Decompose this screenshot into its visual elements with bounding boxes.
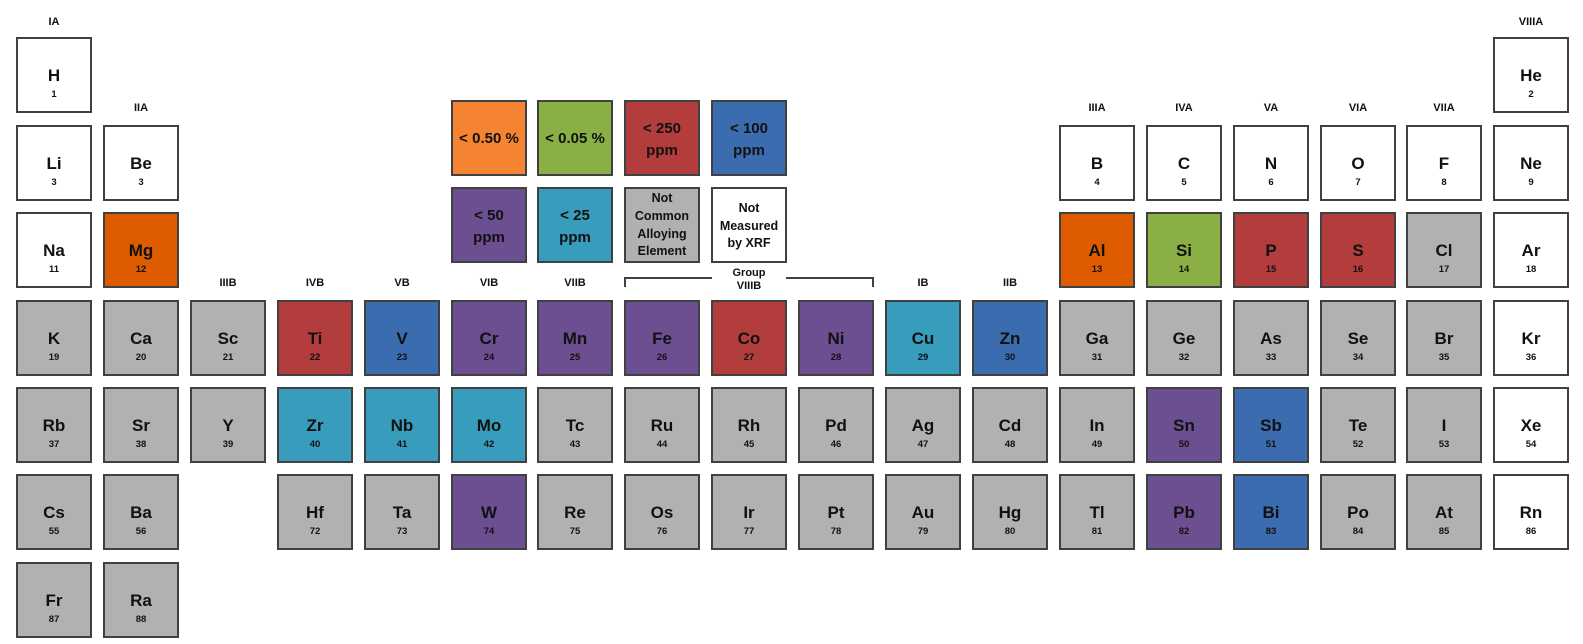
- element: Ag: Ag: [912, 416, 934, 435]
- element: V: 23: [397, 352, 407, 363]
- element: Pt: 78: [831, 526, 841, 537]
- element: Co: 27: [744, 352, 754, 363]
- element: Na: 11: [49, 264, 59, 275]
- element: Cs: Cs: [43, 503, 65, 522]
- element: P: [1233, 212, 1309, 288]
- element: Re: [537, 474, 613, 550]
- element: Sr: [103, 387, 179, 463]
- element: Sc: Sc: [218, 329, 238, 348]
- element: Bi: 83: [1266, 526, 1276, 537]
- element: P: P: [1265, 241, 1277, 260]
- element: Cs: 55: [49, 526, 59, 537]
- element: O: O: [1351, 154, 1365, 173]
- legend item: under 50 ppm: < 50: [474, 206, 504, 224]
- group label: VB: VB: [394, 277, 410, 289]
- legend item: not common alloying element: Not: [652, 191, 672, 205]
- element: Ne: [1493, 125, 1569, 201]
- element: Cl: 17: [1439, 264, 1449, 275]
- group label: VIB: VIB: [480, 277, 498, 289]
- element: Ga: 31: [1092, 352, 1102, 363]
- element: Rh: Rh: [738, 416, 760, 435]
- element: Ge: 32: [1179, 352, 1189, 363]
- element: Te: [1320, 387, 1396, 463]
- element: B: B: [1091, 154, 1103, 173]
- element: Ca: [103, 300, 179, 376]
- element: Pd: Pd: [825, 416, 847, 435]
- element: H: 1: [51, 89, 57, 100]
- element: Sr: 38: [136, 439, 146, 450]
- element: Os: Os: [651, 503, 673, 522]
- legend item: under 100 ppm: [711, 100, 787, 176]
- element: Ra: [103, 562, 179, 638]
- element: Y: 39: [223, 439, 233, 450]
- element: Ni: Ni: [828, 329, 844, 348]
- element: He: 2: [1528, 89, 1534, 100]
- element: Ra: 88: [136, 614, 146, 625]
- element: B: [1059, 125, 1135, 201]
- element: Cs: [16, 474, 92, 550]
- element: Ir: [711, 474, 787, 550]
- element: Bi: [1233, 474, 1309, 550]
- element: Ar: Ar: [1522, 241, 1540, 260]
- element: Y: [190, 387, 266, 463]
- element: Pt: [798, 474, 874, 550]
- element: Hg: Hg: [999, 503, 1021, 522]
- element: Sn: 50: [1179, 439, 1189, 450]
- element: Ge: Ge: [1173, 329, 1195, 348]
- element: Rh: 45: [744, 439, 754, 450]
- legend item: under 0.05 percent: < 0.05 %: [545, 130, 605, 146]
- group bracket: Group VIIIB: Group: [732, 267, 766, 279]
- element: Li: Li: [46, 154, 62, 173]
- element: Fr: Fr: [46, 591, 62, 610]
- element: Cl: Cl: [1436, 241, 1452, 260]
- element: Au: [885, 474, 961, 550]
- element: F: 8: [1441, 177, 1447, 188]
- element: I: [1406, 387, 1482, 463]
- element: Ba: 56: [136, 526, 146, 537]
- element: Sb: 51: [1266, 439, 1276, 450]
- element: Se: [1320, 300, 1396, 376]
- element: Be: 3: [138, 177, 144, 188]
- group label: IIA: IIA: [134, 102, 148, 114]
- element: As: [1233, 300, 1309, 376]
- element: O: 7: [1355, 177, 1361, 188]
- legend item: not measured by XRF: by XRF: [727, 236, 771, 250]
- element: Po: 84: [1353, 526, 1363, 537]
- element: Cr: Cr: [480, 329, 498, 348]
- element: I: 53: [1439, 439, 1449, 450]
- element: Na: Na: [43, 241, 65, 260]
- element: Hf: Hf: [306, 503, 324, 522]
- element: Al: [1059, 212, 1135, 288]
- element: Mn: Mn: [563, 329, 587, 348]
- element: Cu: Cu: [912, 329, 934, 348]
- element: Fe: [624, 300, 700, 376]
- element: K: 19: [49, 352, 59, 363]
- element: Au: Au: [912, 503, 934, 522]
- element: Hf: 72: [310, 526, 320, 537]
- element: Si: Si: [1176, 241, 1192, 260]
- element: O: [1320, 125, 1396, 201]
- legend item: under 250 ppm: ppm: [646, 142, 678, 158]
- element: Cr: [451, 300, 527, 376]
- element: Nb: [364, 387, 440, 463]
- element: Pb: 82: [1179, 526, 1189, 537]
- element: Cd: 48: [1005, 439, 1015, 450]
- element: Au: 79: [918, 526, 928, 537]
- element: Nb: Nb: [391, 416, 413, 435]
- element: Ag: [885, 387, 961, 463]
- element: Br: Br: [1435, 329, 1453, 348]
- element: C: 5: [1181, 177, 1187, 188]
- element: Ca: Ca: [130, 329, 152, 348]
- element: Pd: 46: [831, 439, 841, 450]
- element: B: 4: [1094, 177, 1100, 188]
- element: Ga: [1059, 300, 1135, 376]
- group label: IVB: IVB: [306, 277, 324, 289]
- group label: VIA: VIA: [1349, 102, 1367, 114]
- element: Mn: 25: [570, 352, 580, 363]
- element: Te: 52: [1353, 439, 1363, 450]
- legend item: not measured by XRF: Measured: [720, 219, 778, 233]
- element: Sn: [1146, 387, 1222, 463]
- element: Ir: Ir: [743, 503, 755, 522]
- element: Cr: 24: [484, 352, 494, 363]
- element: Re: 75: [570, 526, 580, 537]
- element: Sc: [190, 300, 266, 376]
- legend item: under 100 ppm: ppm: [733, 142, 765, 158]
- group bracket: Group VIIIB: VIIIB: [737, 280, 761, 292]
- element: Pb: [1146, 474, 1222, 550]
- element: N: [1233, 125, 1309, 201]
- element: Na: [16, 212, 92, 288]
- element: Ir: 77: [744, 526, 754, 537]
- element: Ti: [277, 300, 353, 376]
- group label: VIIIA: VIIIA: [1519, 16, 1543, 28]
- element: Xe: Xe: [1521, 416, 1541, 435]
- element: K: K: [48, 329, 60, 348]
- element: Pb: Pb: [1173, 503, 1195, 522]
- element: Sc: 21: [223, 352, 233, 363]
- element: Tl: [1059, 474, 1135, 550]
- element: At: 85: [1439, 526, 1449, 537]
- legend item: not measured by XRF: Not: [739, 201, 759, 215]
- element: Ru: Ru: [651, 416, 673, 435]
- element: C: [1146, 125, 1222, 201]
- element: W: 74: [484, 526, 494, 537]
- element: Cd: Cd: [999, 416, 1021, 435]
- element: Mg: 12: [136, 264, 146, 275]
- element: S: S: [1352, 241, 1364, 260]
- element: Os: 76: [657, 526, 667, 537]
- element: Co: [711, 300, 787, 376]
- legend item: not common alloying element: Alloying: [637, 226, 687, 240]
- element: Tc: Tc: [566, 416, 584, 435]
- element: Zr: 40: [310, 439, 320, 450]
- element: Kr: 36: [1526, 352, 1536, 363]
- element: Ta: [364, 474, 440, 550]
- legend item: under 0.50 percent: < 0.50 %: [459, 130, 519, 146]
- element: Br: [1406, 300, 1482, 376]
- element: Hg: [972, 474, 1048, 550]
- element: N: 6: [1268, 177, 1274, 188]
- element: Mo: Mo: [477, 416, 501, 435]
- element: Be: Be: [130, 154, 152, 173]
- element: Li: 3: [51, 177, 57, 188]
- legend item: under 250 ppm: [624, 100, 700, 176]
- legend item: under 250 ppm: < 250: [643, 120, 681, 136]
- element: Os: [624, 474, 700, 550]
- element: Xe: 54: [1526, 439, 1536, 450]
- element: He: He: [1520, 66, 1542, 85]
- legend item: under 0.05 percent: [537, 100, 613, 176]
- element: Re: Re: [564, 503, 586, 522]
- element: Ta: Ta: [393, 503, 411, 522]
- element: Po: Po: [1347, 503, 1369, 522]
- element: F: [1406, 125, 1482, 201]
- element: Ar: 18: [1526, 264, 1536, 275]
- element: Mo: 42: [484, 439, 494, 450]
- element: Br: 35: [1439, 352, 1449, 363]
- element: Fe: 26: [657, 352, 667, 363]
- element: In: [1059, 387, 1135, 463]
- element: Ne: Ne: [1520, 154, 1542, 173]
- element: In: In: [1089, 416, 1105, 435]
- element: Si: 14: [1179, 264, 1189, 275]
- group label: VA: VA: [1264, 102, 1278, 114]
- element: Zn: 30: [1005, 352, 1015, 363]
- element: Cd: [972, 387, 1048, 463]
- element: F: F: [1439, 154, 1449, 173]
- element: H: [16, 37, 92, 113]
- element: Te: Te: [1349, 416, 1367, 435]
- element: Si: [1146, 212, 1222, 288]
- element: Mn: [537, 300, 613, 376]
- element: Zr: [277, 387, 353, 463]
- group label: IIIA: IIIA: [1088, 102, 1106, 114]
- group label: IB: IB: [918, 277, 928, 289]
- group label: VIIB: VIIB: [564, 277, 586, 289]
- element: Hf: [277, 474, 353, 550]
- element: C: C: [1178, 154, 1190, 173]
- element: Mg: [103, 212, 179, 288]
- element: Ru: 44: [657, 439, 667, 450]
- element: W: W: [481, 503, 497, 522]
- group label: IIIB: IIIB: [219, 277, 237, 289]
- element: Ni: [798, 300, 874, 376]
- element: Zr: Zr: [306, 416, 324, 435]
- element: Tl: Tl: [1089, 503, 1105, 522]
- group label: IVA: IVA: [1175, 102, 1193, 114]
- element: Mo: [451, 387, 527, 463]
- element: S: 16: [1353, 264, 1363, 275]
- element: Rb: 37: [49, 439, 59, 450]
- element: Ga: Ga: [1086, 329, 1108, 348]
- legend item: under 100 ppm: < 100: [730, 120, 768, 136]
- element: N: N: [1265, 154, 1277, 173]
- element: Be: [103, 125, 179, 201]
- element: Kr: Kr: [1522, 329, 1540, 348]
- element: Xe: [1493, 387, 1569, 463]
- element: At: At: [1435, 503, 1453, 522]
- element: V: V: [396, 329, 408, 348]
- element: Ni: 28: [831, 352, 841, 363]
- element: Po: [1320, 474, 1396, 550]
- element: Ne: 9: [1528, 177, 1534, 188]
- element: Hg: 80: [1005, 526, 1015, 537]
- group label: IIB: IIB: [1003, 277, 1017, 289]
- legend item: under 25 ppm: [537, 187, 613, 263]
- element: Y: Y: [222, 416, 234, 435]
- element: K: [16, 300, 92, 376]
- legend: detection limits: [451, 100, 787, 263]
- element: Li: [16, 125, 92, 201]
- group label: VIIA: VIIA: [1433, 102, 1455, 114]
- element: P: 15: [1266, 264, 1276, 275]
- element: Tc: 43: [570, 439, 580, 450]
- element: Cu: [885, 300, 961, 376]
- legend item: under 0.50 percent: [451, 100, 527, 176]
- element: Ti: 22: [310, 352, 320, 363]
- element: Sr: Sr: [132, 416, 150, 435]
- element: Rb: Rb: [43, 416, 65, 435]
- element: Sn: Sn: [1173, 416, 1195, 435]
- element: At: [1406, 474, 1482, 550]
- element: Nb: 41: [397, 439, 407, 450]
- element: W: [451, 474, 527, 550]
- element: Tc: [537, 387, 613, 463]
- element: Tl: 81: [1092, 526, 1102, 537]
- legend item: not common alloying element: Common: [635, 209, 689, 223]
- element: He: [1493, 37, 1569, 113]
- element: H: H: [48, 66, 60, 85]
- element: Fe: Fe: [652, 329, 672, 348]
- element: Rn: 86: [1526, 526, 1536, 537]
- element: S: [1320, 212, 1396, 288]
- element: Rn: Rn: [1520, 503, 1542, 522]
- legend item: under 50 ppm: [451, 187, 527, 263]
- legend item: not common alloying element: [624, 187, 700, 263]
- element: Ag: 47: [918, 439, 928, 450]
- element: I: I: [1442, 416, 1446, 435]
- legend item: not measured by XRF: [711, 187, 787, 263]
- element: Pd: [798, 387, 874, 463]
- element: Ar: [1493, 212, 1569, 288]
- element: In: 49: [1092, 439, 1102, 450]
- legend item: under 25 ppm: ppm: [559, 228, 591, 246]
- element: Fr: [16, 562, 92, 638]
- element: Ba: Ba: [130, 503, 152, 522]
- element: Bi: Bi: [1262, 503, 1280, 522]
- element: Ti: Ti: [308, 329, 322, 348]
- element: Cl: [1406, 212, 1482, 288]
- element: Kr: [1493, 300, 1569, 376]
- element: Al: 13: [1092, 264, 1102, 275]
- element: Sb: [1233, 387, 1309, 463]
- legend item: under 50 ppm: ppm: [473, 228, 505, 246]
- element: Zn: Zn: [1000, 329, 1020, 348]
- element: Ge: [1146, 300, 1222, 376]
- element: Ba: [103, 474, 179, 550]
- legend item: under 25 ppm: < 25: [560, 206, 590, 224]
- group bracket: Group VIIIB: [624, 267, 874, 292]
- element: Rh: [711, 387, 787, 463]
- element: Se: 34: [1353, 352, 1363, 363]
- element: V: [364, 300, 440, 376]
- group label: IA: IA: [48, 16, 60, 28]
- element: Se: Se: [1348, 329, 1368, 348]
- legend item: not common alloying element: Element: [638, 244, 686, 258]
- element: As: 33: [1266, 352, 1276, 363]
- element: Ra: Ra: [130, 591, 152, 610]
- element: Co: Co: [738, 329, 760, 348]
- element: Ru: [624, 387, 700, 463]
- element: Rn: [1493, 474, 1569, 550]
- element: Al: Al: [1088, 241, 1106, 260]
- element: As: As: [1260, 329, 1282, 348]
- element: Fr: 87: [49, 614, 59, 625]
- element: Ca: 20: [136, 352, 146, 363]
- element: Cu: 29: [918, 352, 928, 363]
- element: Ta: 73: [397, 526, 407, 537]
- element: Zn: [972, 300, 1048, 376]
- element: Sb: Sb: [1260, 416, 1282, 435]
- element: Rb: [16, 387, 92, 463]
- element: Pt: Pt: [828, 503, 844, 522]
- element: Mg: Mg: [129, 241, 153, 260]
